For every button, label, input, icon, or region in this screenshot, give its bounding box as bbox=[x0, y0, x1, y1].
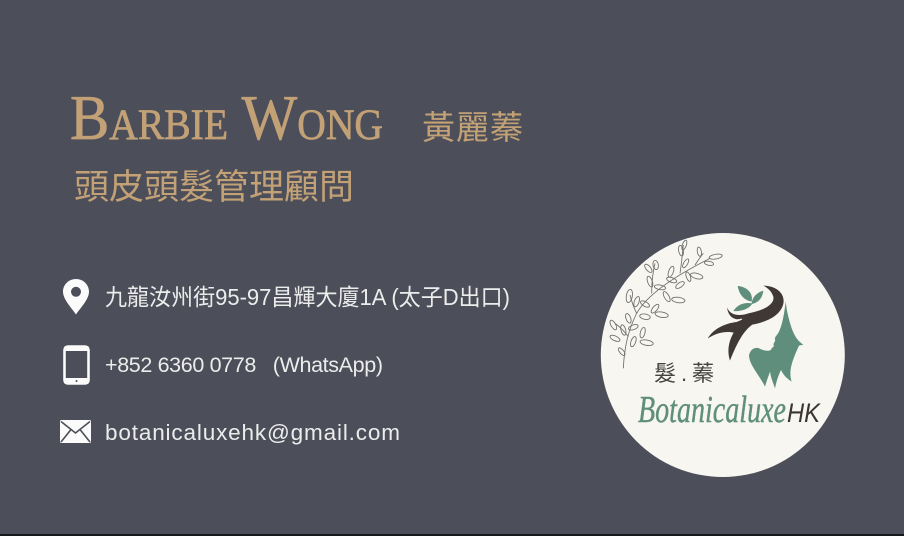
contact: address bbox=[63, 279, 510, 314]
icon: woman's face in profile bbox=[749, 302, 803, 388]
logo badge bbox=[601, 233, 845, 477]
icon: envelope bbox=[60, 420, 91, 443]
phone text: +852 6360 0778 (WhatsApp) bbox=[105, 353, 383, 377]
icon: botanical branch bbox=[609, 240, 723, 368]
English name: BARBIE WONG bbox=[70, 82, 383, 153]
contact: email bbox=[60, 420, 400, 445]
icon: green leaves bbox=[733, 286, 763, 311]
contact: phone bbox=[64, 346, 383, 384]
Botanicaluxe: Botanicaluxe bbox=[638, 389, 786, 431]
logo illustration bbox=[609, 240, 803, 388]
address text: 九龍汝州街95-97昌輝大廈1A (太子D出口) bbox=[105, 284, 510, 310]
job title: 頭皮頭髮管理顧問 bbox=[74, 168, 354, 207]
icon: mobile phone bbox=[64, 346, 89, 384]
logo script wordmark bbox=[638, 389, 821, 431]
HK: HK bbox=[787, 398, 821, 428]
logo Chinese wordmark: 髮.蓁 bbox=[654, 361, 714, 386]
Chinese name: 黃麗蓁 bbox=[422, 109, 524, 146]
name heading bbox=[70, 82, 524, 153]
icon: location pin bbox=[63, 279, 89, 314]
icon: dark flowing hair bbox=[708, 286, 784, 361]
email text: botanicaluxehk@gmail.com bbox=[105, 420, 400, 445]
